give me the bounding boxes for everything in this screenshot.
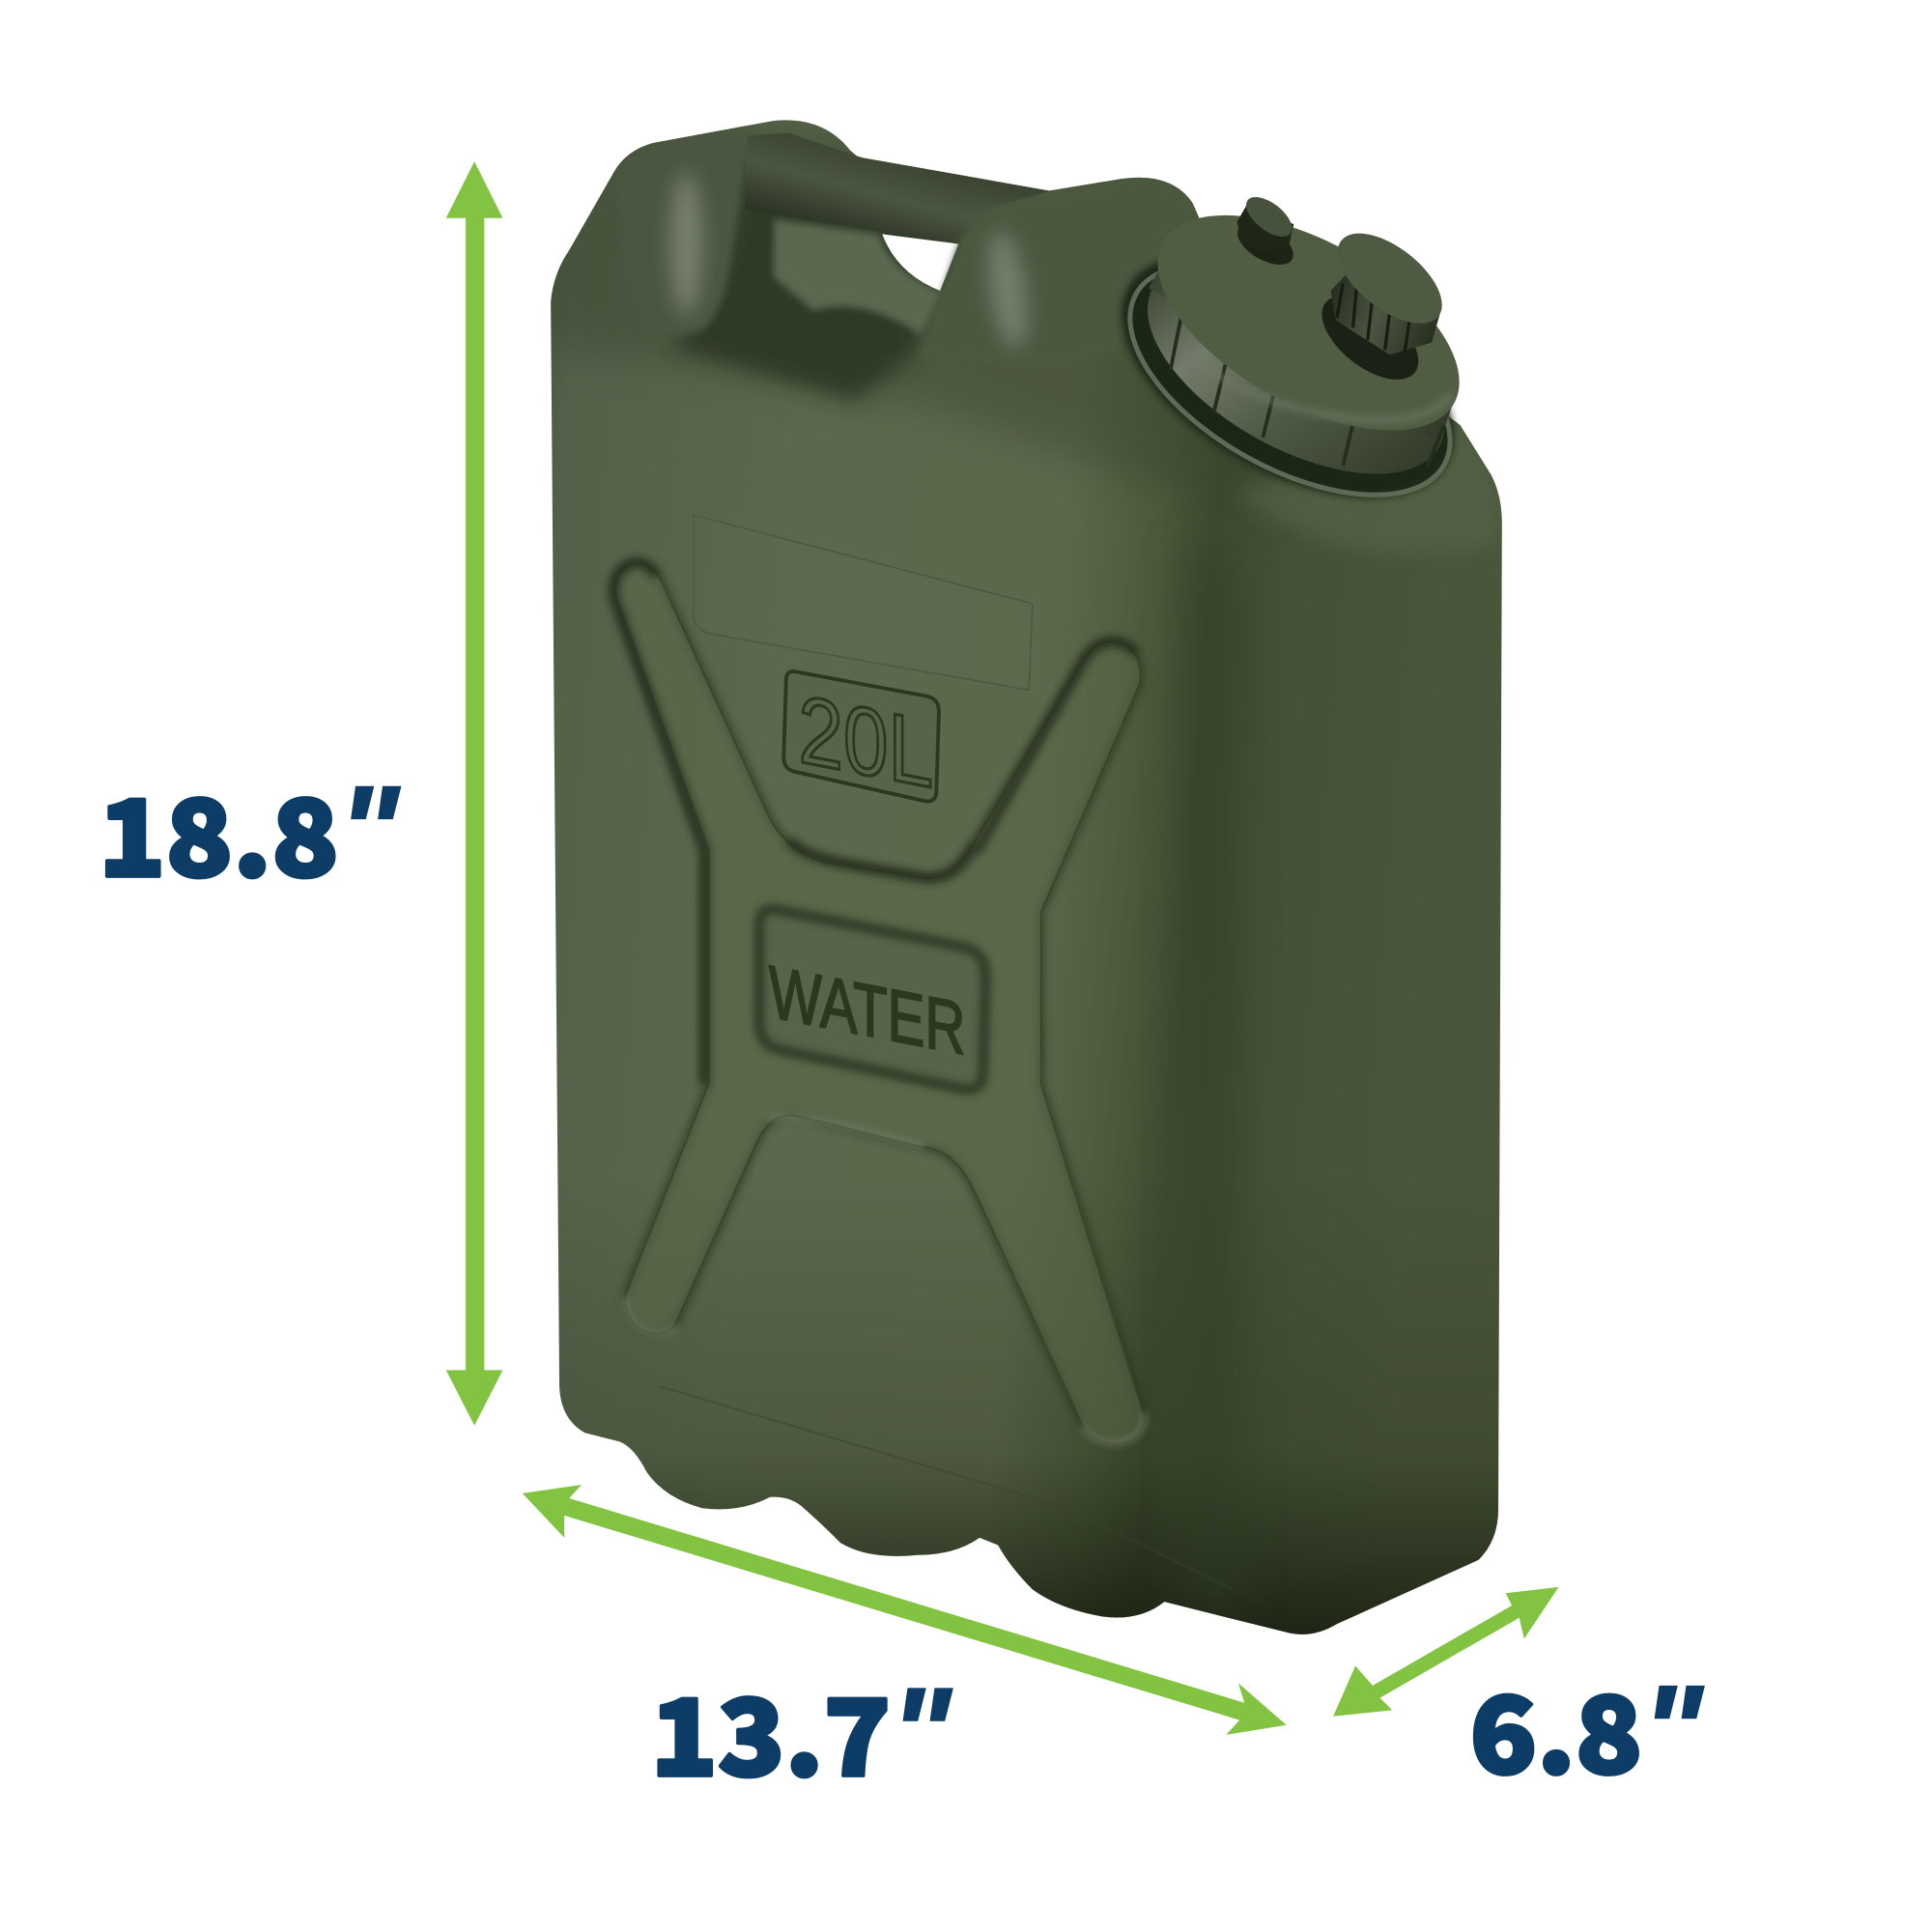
- water can: [542, 120, 1516, 1651]
- left shoulder highlight: [670, 173, 702, 316]
- cap ring: [1093, 216, 1488, 543]
- height label: ": [337, 760, 401, 903]
- can body: [551, 120, 1502, 1634]
- cap top rim highlight: [1182, 349, 1452, 420]
- WATER label: WATER: [769, 950, 965, 1071]
- width label: ": [890, 1662, 953, 1804]
- cap skirt: [1114, 216, 1479, 518]
- depth label: ": [1641, 1660, 1705, 1803]
- X relief dark edges: [613, 562, 1136, 1084]
- small vent knob: [1231, 189, 1300, 273]
- handle grip: [746, 133, 1051, 244]
- large spout knob: [1307, 216, 1458, 396]
- height arrow: [446, 161, 502, 1426]
- body shading: [542, 124, 1516, 1651]
- width arrow: [523, 1485, 1287, 1735]
- width label: 13.7: [650, 1653, 891, 1806]
- cap flange: [1082, 203, 1493, 549]
- height label: 18.8: [99, 753, 339, 907]
- handle recess inner wall: [774, 219, 943, 335]
- left shoulder: [616, 124, 744, 340]
- X relief panel: [615, 564, 1143, 1443]
- 20L label: 20L: [799, 674, 933, 809]
- handle recess shadow: [671, 161, 958, 401]
- X relief highlights: [626, 1118, 1145, 1443]
- 20L plate: [783, 671, 939, 802]
- X relief shadow: [615, 564, 1143, 1443]
- depth label: 6.8: [1470, 1650, 1642, 1804]
- depth arrow: [1333, 1587, 1559, 1717]
- right shoulder: [926, 178, 1200, 351]
- WATER plate: [759, 909, 985, 1090]
- right shoulder highlight: [982, 229, 1034, 351]
- cap top: [1123, 171, 1493, 474]
- handle opening: [882, 234, 958, 291]
